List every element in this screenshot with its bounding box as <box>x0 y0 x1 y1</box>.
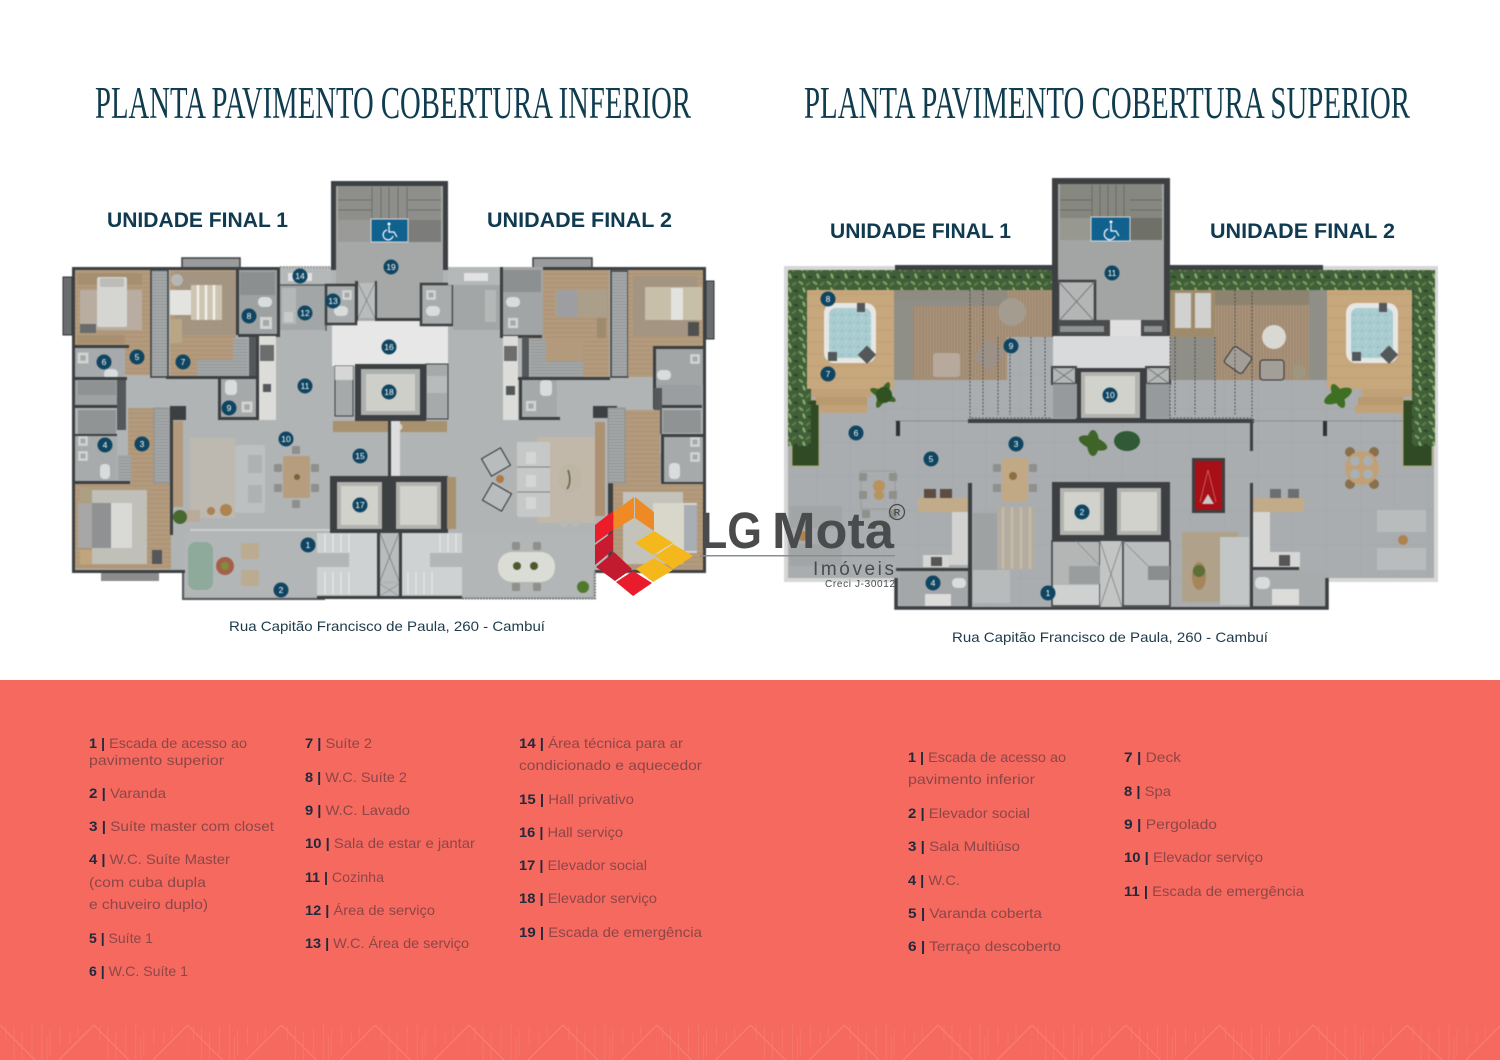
logo: LG Mota Imóveis <box>595 497 904 596</box>
legend column 4: 3 | Sala Multiúso <box>908 838 1020 854</box>
numbered markers, upper level: 5 <box>929 454 934 464</box>
pergolado unidade 2 <box>1170 290 1403 436</box>
floor plan: cobertura inferior <box>63 181 714 600</box>
legend column 4 <box>908 749 1066 954</box>
numbered markers, lower level: 10 <box>281 434 291 444</box>
suíte 1 <box>75 270 168 377</box>
numbered markers, upper level: 7 <box>826 369 831 379</box>
legend column 5: 9 | Pergolado <box>1124 816 1217 832</box>
numbered markers, upper level: 6 <box>854 428 859 438</box>
legend column 4: 5 | Varanda coberta <box>908 905 1042 921</box>
numbered markers, lower level: 17 <box>355 500 365 510</box>
legend column 3: 18 | Elevador serviço <box>519 890 657 906</box>
sala multiuso <box>968 419 1254 607</box>
estar e jantar unidade 2 <box>481 437 595 593</box>
address, superior: Rua Capitão Francisco de Paula, 260 - Cambuí <box>952 629 1268 645</box>
numbered markers, upper level: 3 <box>1014 439 1019 449</box>
legend column 2: 11 | Cozinha <box>305 869 384 885</box>
numbered markers, lower level: 5 <box>135 352 140 362</box>
legend column 5: 7 | Deck <box>1124 749 1182 765</box>
legend column 4: 6 | Terraço descoberto <box>908 938 1061 954</box>
legend panel background <box>0 680 1500 1060</box>
numbered markers, lower level: 6 <box>102 357 107 367</box>
numbered markers, lower level: 19 <box>386 262 396 272</box>
legend column 1: 5 | Suíte 1 <box>89 930 153 946</box>
terraço unidade 1 <box>790 471 969 606</box>
logo wordmark: R <box>894 508 901 518</box>
hall and elevador serviço <box>1052 336 1170 423</box>
numbered markers, upper level: 4 <box>931 578 936 588</box>
logo mark <box>595 497 693 596</box>
legend column 3 <box>519 735 702 940</box>
legend column 1: (com cuba dupla <box>89 874 206 890</box>
cozinha e lavado <box>166 336 353 420</box>
hedges and planters <box>788 270 1435 466</box>
legend column 2: 7 | Suíte 2 <box>305 735 372 751</box>
core serviço unidade 2 <box>421 267 500 419</box>
logo wordmark <box>700 502 904 590</box>
numbered markers, upper level <box>820 266 1120 600</box>
pergolado unidade 1 <box>869 290 1053 436</box>
numbered markers, upper level: 11 <box>1108 268 1117 278</box>
numbered markers, lower level <box>96 260 398 598</box>
label: unidade final 2, inferior: UNIDADE FINAL 2 <box>487 209 672 232</box>
elevadores sociais e de serviço <box>330 364 456 533</box>
legend column 4: 1 | Escada de acesso ao <box>908 749 1066 765</box>
numbered markers, upper level: 8 <box>826 294 831 304</box>
suíte 2 <box>170 270 256 377</box>
legend column 4: 2 | Elevador social <box>908 805 1030 821</box>
legend column 3: condicionado e aquecedor <box>519 757 702 773</box>
escadas <box>317 531 462 599</box>
numbered markers, upper level: 9 <box>1009 341 1014 351</box>
label: unidade final 2, superior: UNIDADE FINAL 2 <box>1210 220 1395 243</box>
address, inferior: Rua Capitão Francisco de Paula, 260 - Cambuí <box>229 618 545 634</box>
legend column 1: 1 | Escada de acesso ao <box>89 735 247 751</box>
elevadores e escadas <box>1052 482 1170 607</box>
structure and terrace floor <box>784 265 1438 608</box>
legend column 1: 3 | Suíte master com closet <box>89 818 274 834</box>
numbered markers, upper level: 10 <box>1105 390 1115 400</box>
legend column 5: 8 | Spa <box>1124 783 1171 799</box>
numbered markers, lower level: 8 <box>247 311 252 321</box>
legend column 3: 19 | Escada de emergência <box>519 924 702 940</box>
legend column 5 <box>1124 749 1304 899</box>
legend column 5: 11 | Escada de emergência <box>1124 883 1304 899</box>
legend column 2: 9 | W.C. Lavado <box>305 802 410 818</box>
label: unidade final 1, inferior: UNIDADE FINAL 1 <box>107 209 288 232</box>
numbered markers, lower level: 18 <box>384 387 394 397</box>
hall de serviço <box>332 321 448 366</box>
wc suíte 2 and área de serviço <box>236 267 356 337</box>
numbered markers, lower level: 16 <box>384 342 394 352</box>
decorative chevron band <box>0 1024 1500 1060</box>
numbered markers, lower level: 3 <box>140 439 145 449</box>
numbered markers, lower level: 9 <box>227 403 232 413</box>
label: unidade final 1, superior: UNIDADE FINAL 1 <box>830 220 1011 243</box>
terraço unidade 2 <box>1253 447 1426 606</box>
numbered markers, lower level: 7 <box>181 357 186 367</box>
logo wordmark: Mota <box>772 502 895 559</box>
numbered markers, lower level: 2 <box>279 585 284 595</box>
floor plan: cobertura superior <box>784 178 1438 608</box>
legend column 1: e chuveiro duplo) <box>89 896 208 912</box>
legend column 2: 12 | Área de serviço <box>305 902 435 918</box>
legend column 2 <box>305 735 475 951</box>
numbered markers, lower level: 13 <box>328 296 338 306</box>
unidade 2 quartos <box>500 267 703 420</box>
legend column 5: 10 | Elevador serviço <box>1124 849 1263 865</box>
legend column 4: pavimento inferior <box>908 771 1035 787</box>
legend column 1 <box>89 735 274 979</box>
legend column 1: pavimento superior <box>89 752 224 768</box>
legend column 3: 16 | Hall serviço <box>519 824 623 840</box>
stair tower with accessibility sign <box>331 186 448 322</box>
numbered markers, lower level: 14 <box>295 271 305 281</box>
legend column 3: 15 | Hall privativo <box>519 791 634 807</box>
numbered markers, lower level: 4 <box>103 440 108 450</box>
legend column 1: 2 | Varanda <box>89 785 166 801</box>
logo wordmark: LG <box>700 502 762 559</box>
numbered markers, upper level: 1 <box>1046 588 1051 598</box>
legend column 1: 4 | W.C. Suíte Master <box>89 851 230 867</box>
numbered markers, lower level: 11 <box>301 381 310 391</box>
legend column 4: 4 | W.C. <box>908 872 960 888</box>
numbered markers, upper level: 2 <box>1080 507 1085 517</box>
varanda unidade 1 <box>188 542 259 590</box>
structure and floor of lower level <box>63 181 714 600</box>
unidade 2 suíte master <box>593 406 703 570</box>
legend column 3: 17 | Elevador social <box>519 857 647 873</box>
spa deck unidade 2 <box>1322 290 1412 413</box>
legend column 2: 8 | W.C. Suíte 2 <box>305 769 407 785</box>
stair tower with accessibility sign <box>1052 178 1170 337</box>
logo wordmark: Creci J-30012 <box>825 579 895 590</box>
banheiros lado esquerdo <box>75 345 131 484</box>
legend column 1: 6 | W.C. Suíte 1 <box>89 963 188 979</box>
suíte master <box>75 406 186 569</box>
legend column 2: 10 | Sala de estar e jantar <box>305 835 475 851</box>
legend column 2: 13 | W.C. Área de serviço <box>305 935 469 951</box>
unidade 2 banheiros <box>648 346 703 485</box>
numbered markers, lower level: 12 <box>300 308 310 318</box>
spa deck unidade 1 <box>807 290 894 413</box>
title: planta cobertura inferior: PLANTA PAVIMENTO COBERTURA INFERIOR <box>95 78 691 128</box>
numbered markers, lower level: 15 <box>355 451 365 461</box>
numbered markers, lower level: 1 <box>306 540 311 550</box>
legend column 3: 14 | Área técnica para ar <box>519 735 683 751</box>
estar e jantar <box>173 438 330 530</box>
logo wordmark: Imóveis <box>813 559 894 580</box>
